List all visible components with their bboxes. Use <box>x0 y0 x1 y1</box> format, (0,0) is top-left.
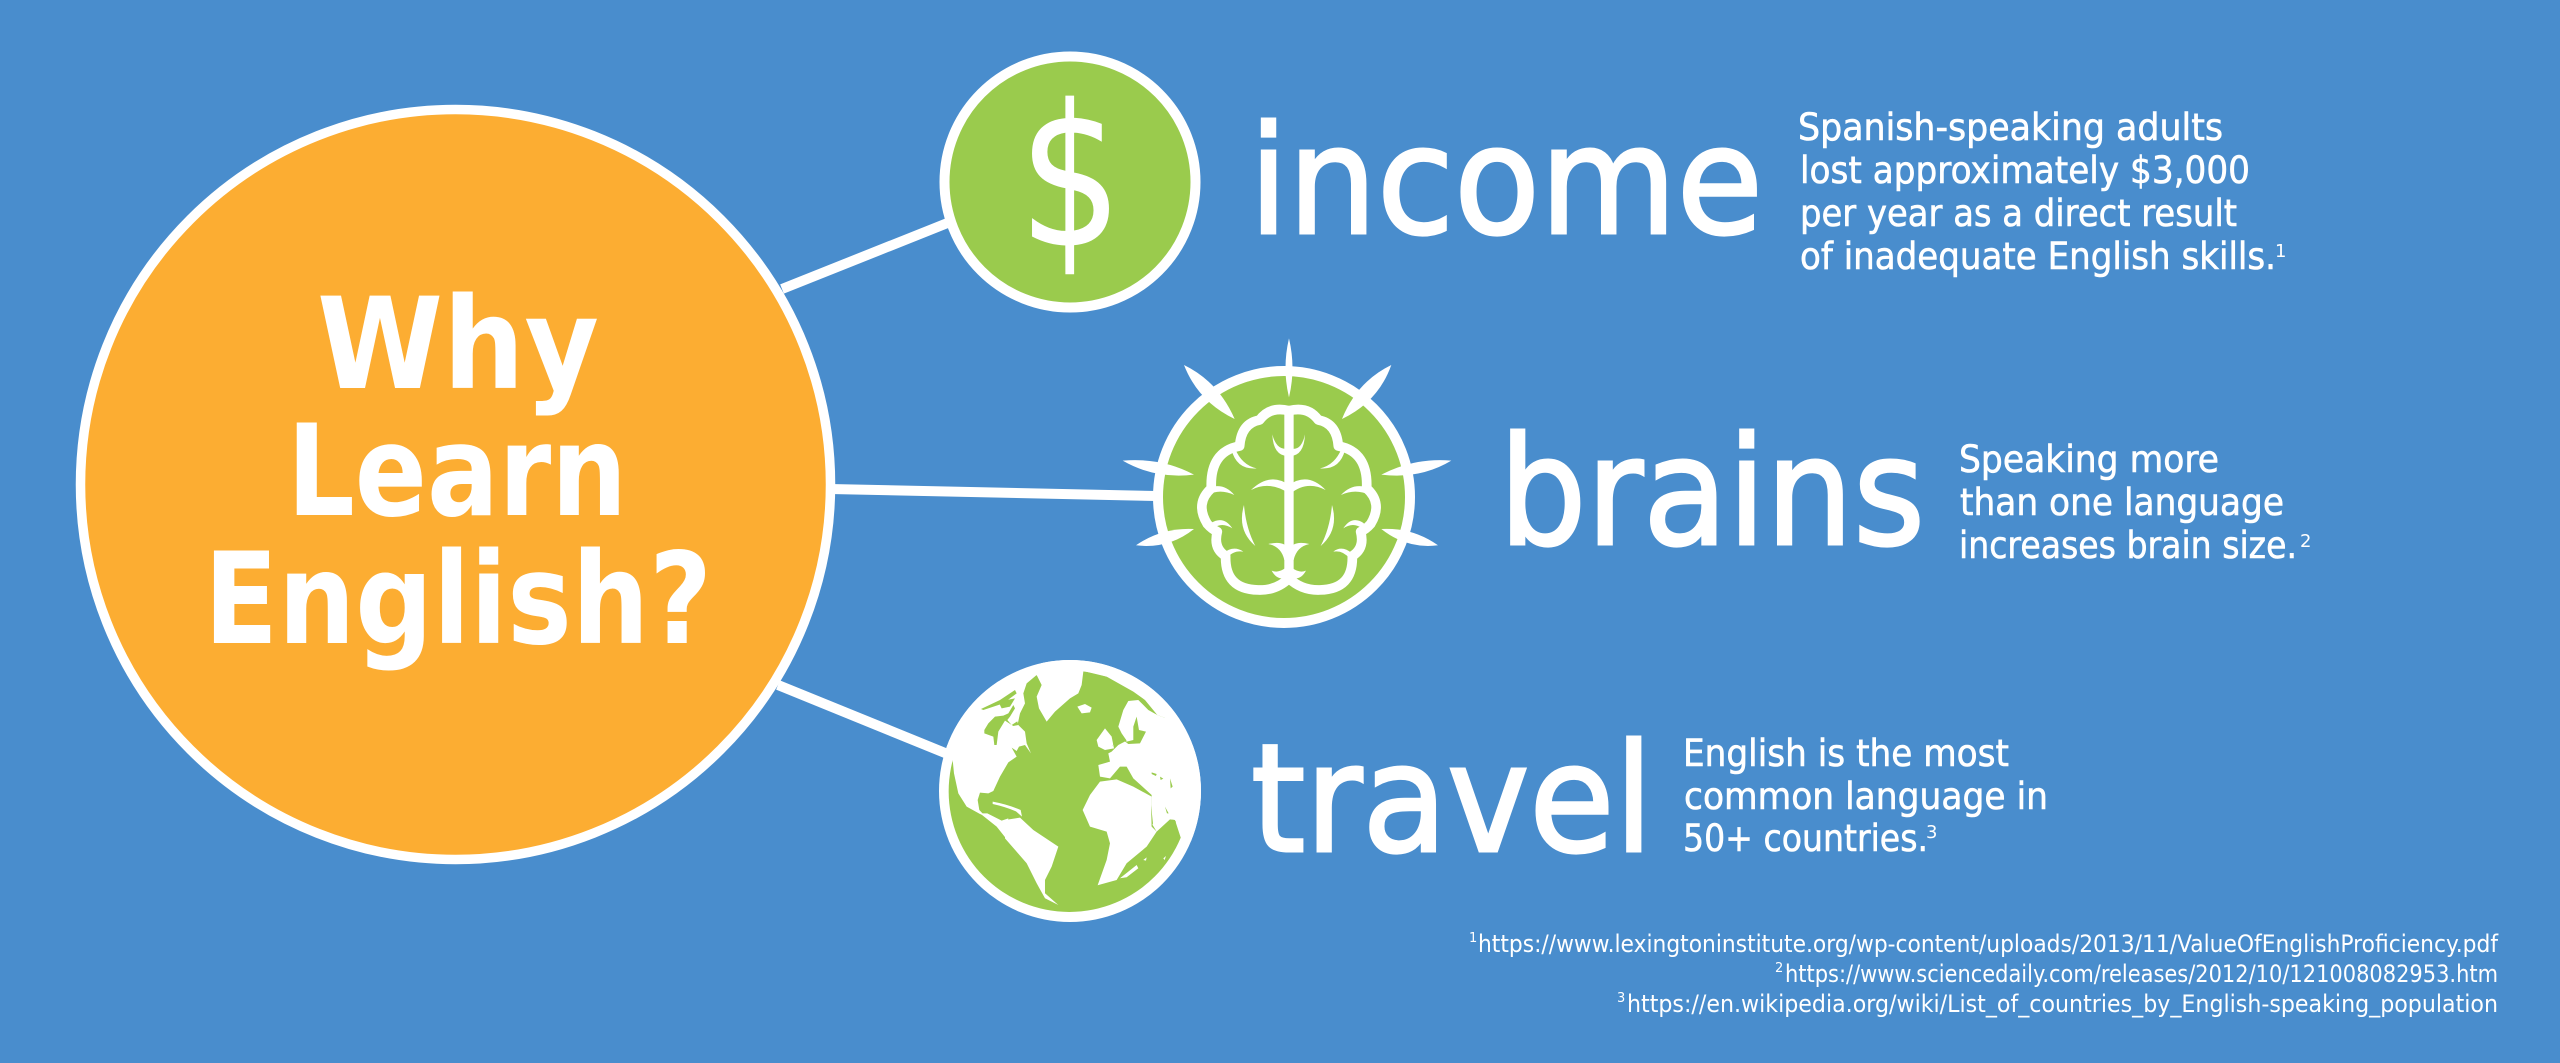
title: Learn <box>287 397 627 545</box>
connector lines <box>778 222 1156 755</box>
icon: dollar circle <box>944 56 1196 308</box>
footnotes: 2 <box>1775 961 1783 976</box>
icon: dollar circle: $ <box>1019 64 1122 292</box>
text block: travel: common language in <box>1684 775 2048 818</box>
text block: brains: 2 <box>2300 531 2311 552</box>
title <box>204 270 712 673</box>
brain outline <box>1202 409 1376 590</box>
rays <box>1123 338 1451 546</box>
text block: travel <box>1683 732 2048 860</box>
seas <box>981 690 1176 827</box>
title: English? <box>204 525 712 673</box>
text block: travel: 3 <box>1926 822 1937 843</box>
text block: income: lost approximately $3,000 <box>1800 149 2250 192</box>
heading: brains: brains <box>1499 406 1925 580</box>
heading: income: income <box>1249 95 1763 269</box>
text block: brains <box>1959 438 2311 567</box>
text block: brains: increases brain size. <box>1959 524 2297 567</box>
main circle: why learn english <box>80 110 830 860</box>
text block: brains: than one language <box>1960 481 2284 524</box>
text block: income: 1 <box>2275 241 2286 262</box>
text block: income: per year as a direct result <box>1800 192 2237 235</box>
text block: income: of inadequate English skills. <box>1800 235 2276 278</box>
continents <box>946 660 1201 905</box>
footnotes <box>1469 930 2498 1018</box>
text block: income <box>1798 106 2286 278</box>
text block: income: Spanish-speaking adults <box>1798 106 2223 149</box>
text block: brains: Speaking more <box>1959 438 2219 481</box>
text block: travel: English is the most <box>1683 732 2009 775</box>
footnotes: https://en.wikipedia.org/wiki/List_of_countries_by_English-speaking_population <box>1627 990 2498 1018</box>
heading: travel: travel <box>1251 713 1653 887</box>
icon: brain circle <box>1123 338 1451 623</box>
footnotes: 1 <box>1469 931 1477 946</box>
title: Why <box>317 270 599 418</box>
text block: travel: 50+ countries. <box>1683 817 1928 860</box>
icon: globe <box>938 653 1217 922</box>
footnotes: 3 <box>1617 991 1625 1006</box>
